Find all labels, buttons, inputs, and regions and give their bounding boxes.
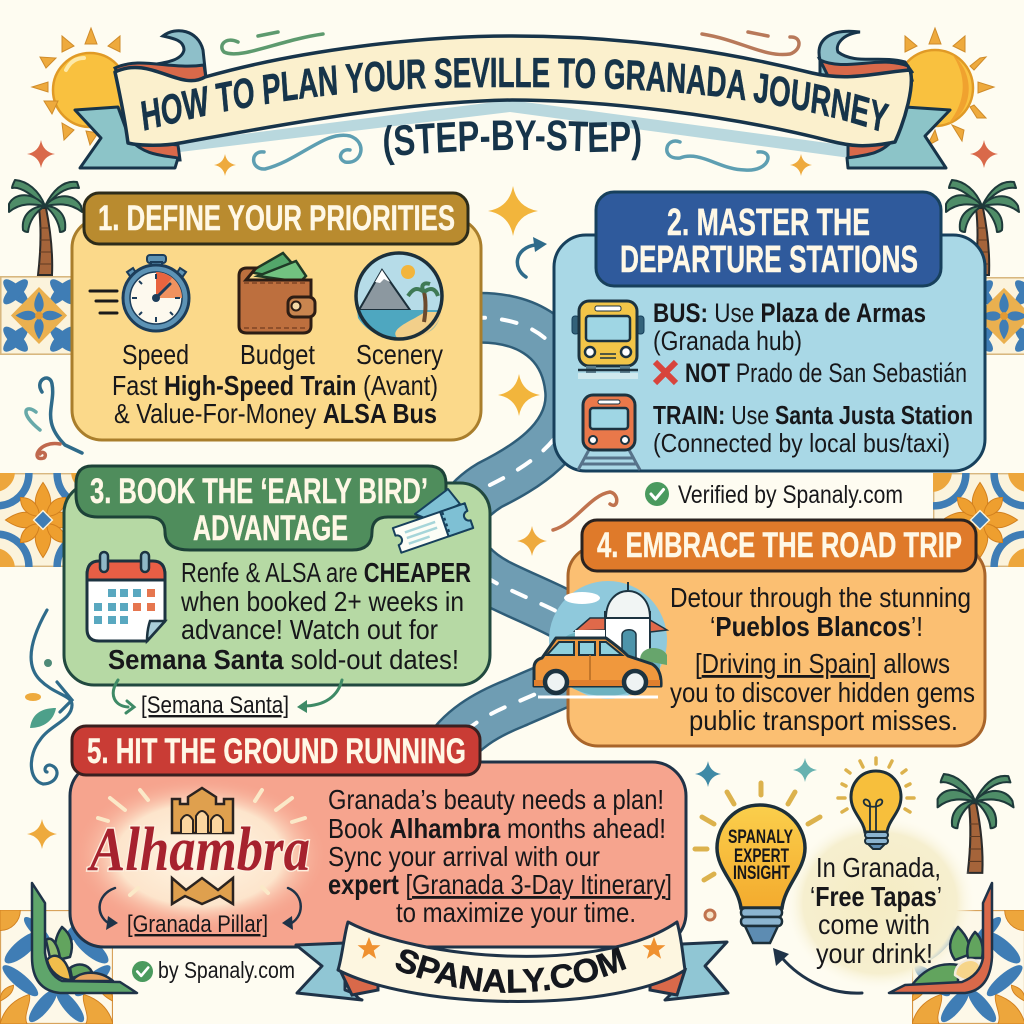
panel 2: master the departure stations [554,192,985,471]
heading 1 [84,193,468,244]
heading 4 [582,520,976,571]
road trip text: ‘Pueblos Blancos’! [710,611,923,642]
tip glow [784,815,976,991]
sun right [897,28,994,146]
early bird text: advance! Watch out for [181,614,438,645]
hit the ground text [328,784,672,928]
road trip text: [Driving in Spain] allows [695,648,950,679]
expert insight label: INSIGHT [733,863,790,884]
expert insight label: EXPERT [734,846,789,867]
hit the ground text: expert [Granada 3-Day Itinerary] [328,869,672,900]
priorities text: & Value-For-Money ALSA Bus [114,398,437,429]
brand ribbon [294,920,730,1003]
heading 2 [596,192,941,286]
title text: HOW TO PLAN YOUR SEVILLE TO GRANADA JOURNEY [141,58,890,132]
semana santa link with arrows: [Semana Santa] [141,692,289,719]
granada pillar link with arrows [100,888,301,938]
early bird text: Renfe & ALSA are CHEAPER [181,557,471,588]
road trip text [670,582,975,736]
hit the ground text: Sync your arrival with our [328,841,600,872]
heading 1: 1. DEFINE YOUR PRIORITIES [98,199,455,238]
icon labels [122,339,443,370]
free tapas tip: ‘Free Tapas’ [810,881,942,912]
not prado text: NOT Prado de San Sebastián [685,358,967,388]
arrow: tip to bulb [773,948,862,993]
priorities text [112,370,438,429]
icon: stopwatch [90,255,189,331]
corner ornament left [32,883,137,993]
panel 1: define your priorities [72,193,481,440]
road trip text: you to discover hidden gems [670,677,975,708]
granada pillar link with arrows: [Granada Pillar] [127,911,268,938]
road trip text: public transport misses. [689,705,958,736]
corner ornament right [889,883,992,993]
icon: red cross [655,362,676,383]
icon: small bulb [838,758,914,849]
icon: wallet [239,253,315,333]
heading 3: 3. BOOK THE ‘EARLY BIRD’ [90,472,428,511]
icon: tickets [393,489,473,553]
road trip text: Detour through the stunning [670,582,971,613]
winding road [445,318,600,755]
hit the ground text: Granada’s beauty needs a plan! [328,784,664,815]
icon: village and car [534,581,667,699]
icon: bus [572,301,644,379]
early bird text [108,557,471,675]
icon labels: Speed [122,339,189,370]
panel 4: embrace the road trip [534,520,985,746]
verified badge: Verified by Spanaly.com [678,481,903,509]
bus text: BUS: Use Plaza de Armas [653,298,926,328]
alhambra logo [72,777,328,933]
decorative swirls [26,32,799,784]
alhambra logo: Alhambra [87,816,310,884]
sparkle stars [25,140,998,849]
decorative dot [705,910,715,920]
priorities text: Fast High-Speed Train (Avant) [112,370,438,401]
sun left [32,28,127,145]
icon: calendar [87,552,165,641]
panel 3: book the early bird advantage [64,466,490,685]
hit the ground text: to maximize your time. [396,897,636,928]
panel 5: hit the ground running [70,726,686,947]
decorative tiles [0,276,1024,1024]
heading 5 [72,726,480,775]
semana santa link with arrows [113,680,342,719]
icon labels: Scenery [356,339,443,370]
bus hub text: (Granada hub) [653,326,802,356]
icon: scenery [356,253,442,340]
heading 2: 2. MASTER THE [667,202,870,244]
heading 5: 5. HIT THE GROUND RUNNING [87,732,466,771]
subtitle: (STEP-BY-STEP) [384,120,640,166]
heading 3 [76,466,446,550]
heading 3: ADVANTAGE [193,509,348,548]
free tapas tip [810,852,942,969]
icon: expert bulb [695,783,820,943]
brand text: SPANALY.COM [396,947,626,993]
train connection text: (Connected by local bus/taxi) [653,428,950,458]
free tapas tip: your drink! [816,938,933,969]
icon labels: Budget [240,339,315,370]
icon: train [578,395,640,470]
free tapas tip: come with [818,909,930,940]
hit the ground text: Book Alhambra months ahead! [328,813,666,844]
early bird text: when booked 2+ weeks in [180,586,464,617]
train text: TRAIN: Use Santa Justa Station [653,400,973,430]
free tapas tip: In Granada, [816,852,941,883]
by spanaly badge: by Spanaly.com [158,957,295,983]
expert insight label [728,827,793,884]
title ribbon [73,29,952,170]
expert insight label: SPANALY [728,827,793,848]
palm trees [9,180,1019,873]
early bird text: Semana Santa sold-out dates! [108,644,459,675]
